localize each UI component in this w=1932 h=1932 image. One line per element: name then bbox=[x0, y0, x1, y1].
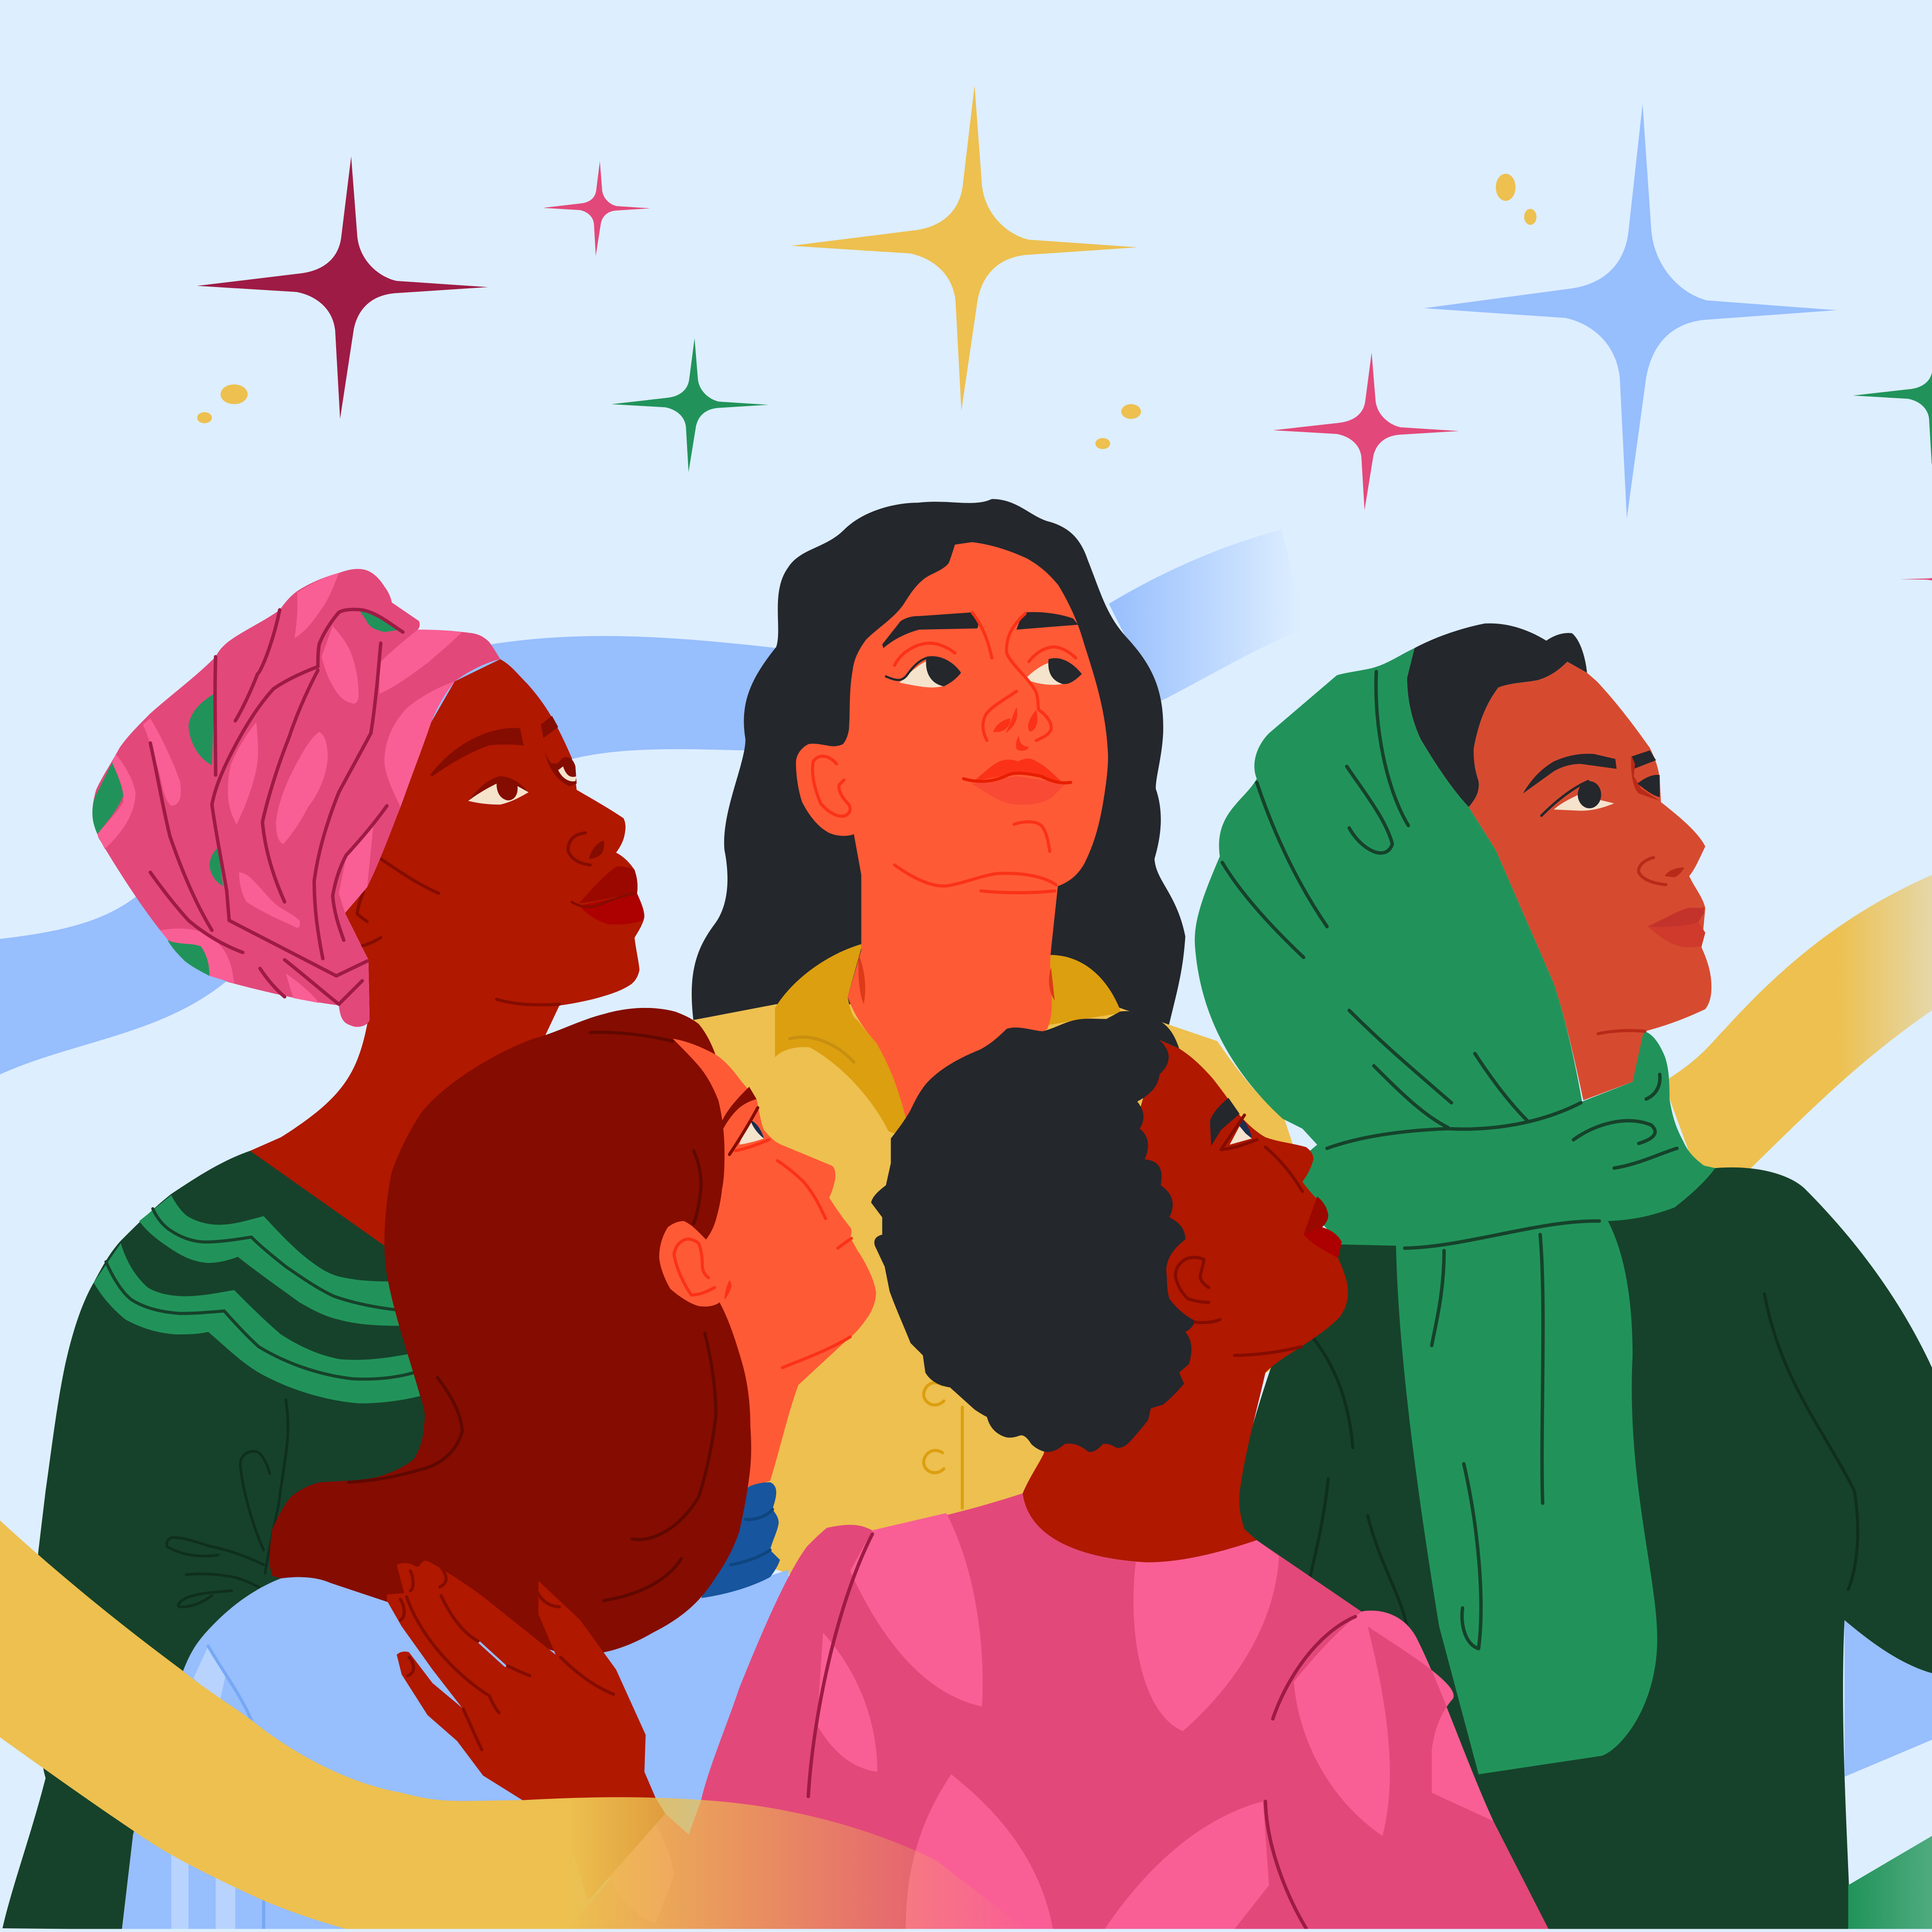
star yellow bbox=[791, 85, 1137, 411]
eyebrows bbox=[882, 612, 1078, 648]
cheek bbox=[1265, 1147, 1302, 1192]
far eye bbox=[1638, 775, 1660, 797]
far brow bbox=[541, 716, 558, 738]
hair bbox=[871, 1011, 1195, 1452]
right woman bbox=[1195, 623, 1932, 1932]
leaf marks bbox=[167, 1400, 288, 1607]
eye white bbox=[1554, 795, 1614, 811]
facial features bbox=[1523, 750, 1705, 1034]
neck bbox=[848, 850, 1058, 1128]
star pink bbox=[1273, 353, 1459, 510]
ear line bbox=[1175, 1257, 1209, 1302]
upper lip bbox=[1647, 907, 1704, 927]
brow bbox=[1210, 1098, 1239, 1146]
hair strands bbox=[349, 1032, 716, 1600]
ear bbox=[659, 1221, 727, 1307]
ear line bbox=[674, 1239, 714, 1295]
hand bbox=[387, 1561, 665, 1901]
lips bbox=[963, 759, 1071, 805]
lower lip bbox=[1647, 923, 1705, 947]
lash bbox=[1542, 781, 1588, 816]
yellow ribbon right bbox=[1664, 875, 1932, 1183]
upper band bbox=[139, 1195, 401, 1326]
knuckle lines bbox=[401, 1567, 613, 1750]
stitch lines bbox=[106, 1209, 414, 1379]
body bbox=[2, 1151, 480, 1930]
hijab folds bbox=[1222, 671, 1677, 1649]
eye white bbox=[740, 1120, 764, 1145]
brow bbox=[430, 728, 523, 776]
neck and shoulder bbox=[250, 1006, 560, 1246]
neck shade bbox=[858, 955, 1055, 1004]
nose bbox=[1639, 858, 1666, 885]
cheek mark bbox=[725, 1280, 732, 1300]
star big blue bbox=[1424, 104, 1837, 518]
eyes bbox=[886, 656, 1082, 688]
neck mark bbox=[1598, 1031, 1645, 1034]
left woman bbox=[2, 569, 644, 1930]
turban green patches bbox=[92, 611, 401, 976]
scrunch collar bbox=[701, 1482, 780, 1598]
iris bbox=[1578, 781, 1601, 808]
iris and lid bbox=[468, 776, 529, 801]
collar stripes bbox=[94, 1195, 420, 1403]
facial features bbox=[357, 716, 644, 1005]
skin lines bbox=[357, 859, 560, 1005]
yellow ribbon front bbox=[0, 1520, 1029, 1932]
hair bbox=[269, 1039, 751, 1652]
upper lip bbox=[1304, 1196, 1328, 1235]
star green bbox=[612, 338, 768, 472]
neck and face bbox=[1469, 662, 1711, 1100]
eye white bbox=[1230, 1126, 1252, 1145]
face lines bbox=[736, 1140, 851, 1368]
far eye bbox=[545, 752, 577, 786]
stars bbox=[197, 85, 1932, 587]
yellow dots bbox=[197, 174, 1537, 449]
face bbox=[673, 1039, 876, 1487]
nose bbox=[568, 833, 590, 865]
sleeve seam bbox=[208, 1646, 251, 1720]
turban folds bbox=[150, 609, 403, 1004]
shirt patches bbox=[609, 1513, 1493, 1932]
light blue shirt bbox=[122, 1570, 789, 1932]
blue ribbon bbox=[0, 530, 1306, 1074]
collar folds bbox=[731, 1509, 772, 1565]
far eye white bbox=[558, 766, 577, 781]
centre woman bbox=[690, 499, 1312, 1583]
iris bbox=[1239, 1119, 1252, 1139]
lower lip bbox=[579, 893, 644, 925]
body bbox=[1232, 1167, 1932, 1932]
star crimson bbox=[197, 157, 488, 419]
far eye shade bbox=[1631, 755, 1660, 801]
green corner bbox=[1848, 1836, 1932, 1932]
collar crease bbox=[790, 1037, 854, 1062]
far brow bbox=[1632, 750, 1656, 769]
nose and face lines bbox=[813, 612, 1076, 893]
sleeve stripes bbox=[171, 1836, 236, 1930]
eye bbox=[468, 778, 529, 804]
brow bbox=[1523, 754, 1617, 793]
face bbox=[796, 542, 1108, 905]
back hair bbox=[534, 1008, 716, 1059]
finger gap bbox=[478, 1641, 505, 1666]
lip line bbox=[572, 893, 635, 907]
face and neck bbox=[1023, 1040, 1348, 1562]
front left girl bbox=[269, 1008, 876, 1652]
collar bbox=[775, 944, 1121, 1134]
lash bbox=[729, 1108, 758, 1154]
pink shirt bbox=[568, 1493, 1550, 1932]
shirt bbox=[690, 1004, 1312, 1583]
upper lip bbox=[579, 866, 638, 903]
brow bbox=[721, 1087, 757, 1131]
front right girl bbox=[568, 1011, 1550, 1932]
nostril bbox=[1664, 867, 1684, 877]
bottom edge strip bbox=[0, 1929, 1932, 1932]
shirt folds bbox=[808, 1534, 1355, 1928]
lash bbox=[1221, 1115, 1257, 1149]
iris bbox=[750, 1120, 764, 1139]
nostril bbox=[589, 840, 604, 859]
hijab and scarf bbox=[1195, 648, 1715, 1774]
lower lip bbox=[1304, 1227, 1342, 1258]
star green right bbox=[1853, 328, 1932, 465]
hair bbox=[1407, 623, 1587, 807]
blue panel behind arm bbox=[1844, 1620, 1932, 1777]
hair bbox=[692, 499, 1186, 1029]
nostrils bbox=[993, 707, 1037, 751]
lobe and neck marks bbox=[1195, 1320, 1301, 1355]
star small pink bbox=[543, 161, 650, 256]
sleeve highlight bbox=[193, 1646, 225, 1704]
star pink right bbox=[1900, 572, 1932, 587]
turban bbox=[92, 569, 500, 1027]
body folds bbox=[1308, 1294, 1858, 1626]
lower band bbox=[94, 1243, 420, 1403]
face bbox=[345, 659, 644, 1029]
turban patches bbox=[97, 573, 462, 1003]
facial features bbox=[1175, 1098, 1342, 1355]
shirt buttons bbox=[924, 1383, 963, 1508]
